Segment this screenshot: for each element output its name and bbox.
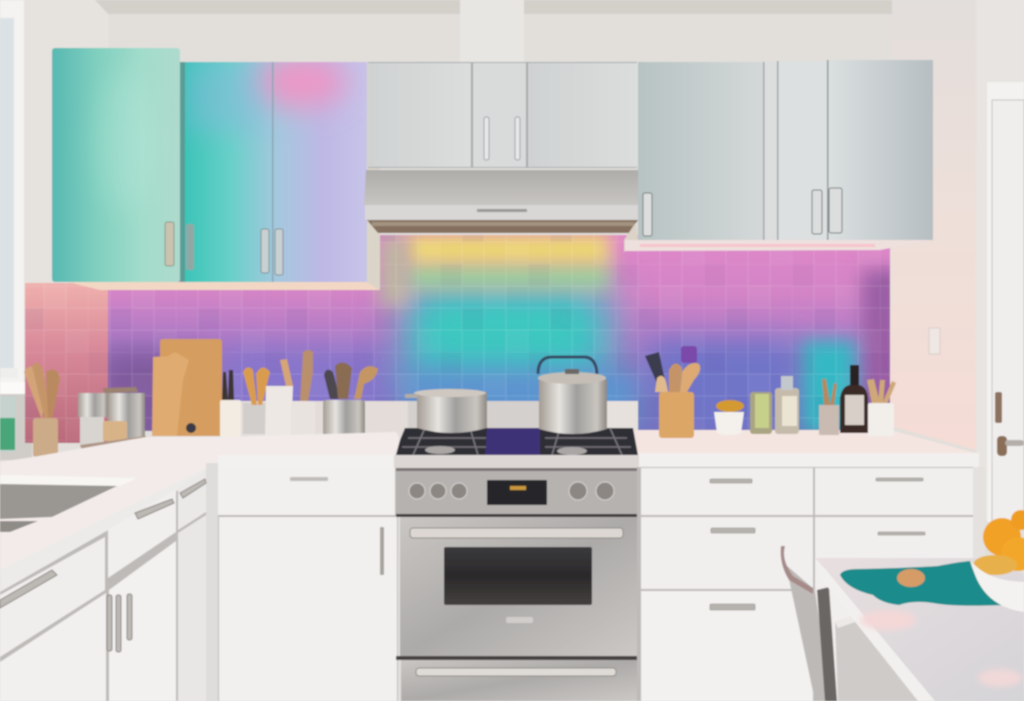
knife block cup (220, 370, 241, 437)
countertop left L-run (0, 437, 218, 570)
countertop back run (218, 432, 400, 455)
right cabinet underside with glow (624, 222, 638, 252)
wood utensils in glass left (24, 363, 60, 457)
far right wall and door frame (976, 0, 1024, 520)
bar chairs (781, 546, 918, 701)
wine bottle (840, 365, 868, 433)
range hood (364, 170, 640, 233)
cabinet side return (367, 62, 380, 290)
countertop front edge (217, 453, 979, 468)
kettle on right burner (538, 357, 607, 434)
stockpot on left burner (405, 389, 487, 433)
left base cabinets (0, 463, 218, 701)
handles (484, 117, 520, 160)
counter backing ledge (365, 401, 638, 432)
oven window (444, 547, 592, 605)
cabinet handle (165, 222, 174, 266)
white crock with utensils (867, 379, 896, 436)
utensil crock right of stove (645, 346, 700, 438)
handles (643, 188, 842, 236)
oven handle (410, 528, 623, 538)
under cabinet light strip left (68, 282, 380, 290)
bottom drawer (401, 660, 637, 701)
oven door (400, 517, 637, 657)
teal towel (840, 561, 1003, 606)
upper cabinet far left teal (52, 48, 180, 282)
handles (0, 479, 206, 652)
drawer pulls (710, 478, 925, 610)
display panel (487, 480, 547, 505)
canisters left (78, 387, 146, 450)
right base cabinets (637, 467, 985, 701)
light switch (929, 328, 940, 354)
center-left base cabinet (218, 468, 398, 701)
upper cabinet iridescent (185, 56, 367, 282)
small white planter (714, 400, 744, 435)
spice jars and bottles (750, 376, 799, 434)
fruit bowl (971, 510, 1024, 612)
steel utensil crock (323, 362, 378, 437)
center upper cabinets (368, 62, 637, 168)
door hinge (995, 392, 1002, 423)
cutting boards (152, 339, 222, 436)
cabinet handles (186, 224, 283, 275)
island countertop (815, 558, 1024, 701)
range (394, 428, 639, 701)
right wall (890, 0, 976, 450)
knobs (409, 482, 614, 500)
backsplash iridescent tile wall (100, 234, 902, 440)
left wall (0, 0, 108, 380)
oven badge (506, 617, 533, 623)
right upper cabinets (638, 60, 933, 240)
window lower pane with green reflection (0, 394, 32, 460)
utensil cup right (819, 379, 839, 435)
backsplash left return (25, 283, 108, 443)
door (987, 82, 1024, 522)
soffit column (460, 0, 524, 62)
spoons and utensil holders (243, 350, 315, 438)
cooktop (396, 428, 638, 455)
window (0, 0, 32, 460)
sink (0, 475, 137, 532)
ceiling (95, 0, 905, 14)
door handle (997, 436, 1024, 456)
cabinet gap (180, 62, 185, 282)
